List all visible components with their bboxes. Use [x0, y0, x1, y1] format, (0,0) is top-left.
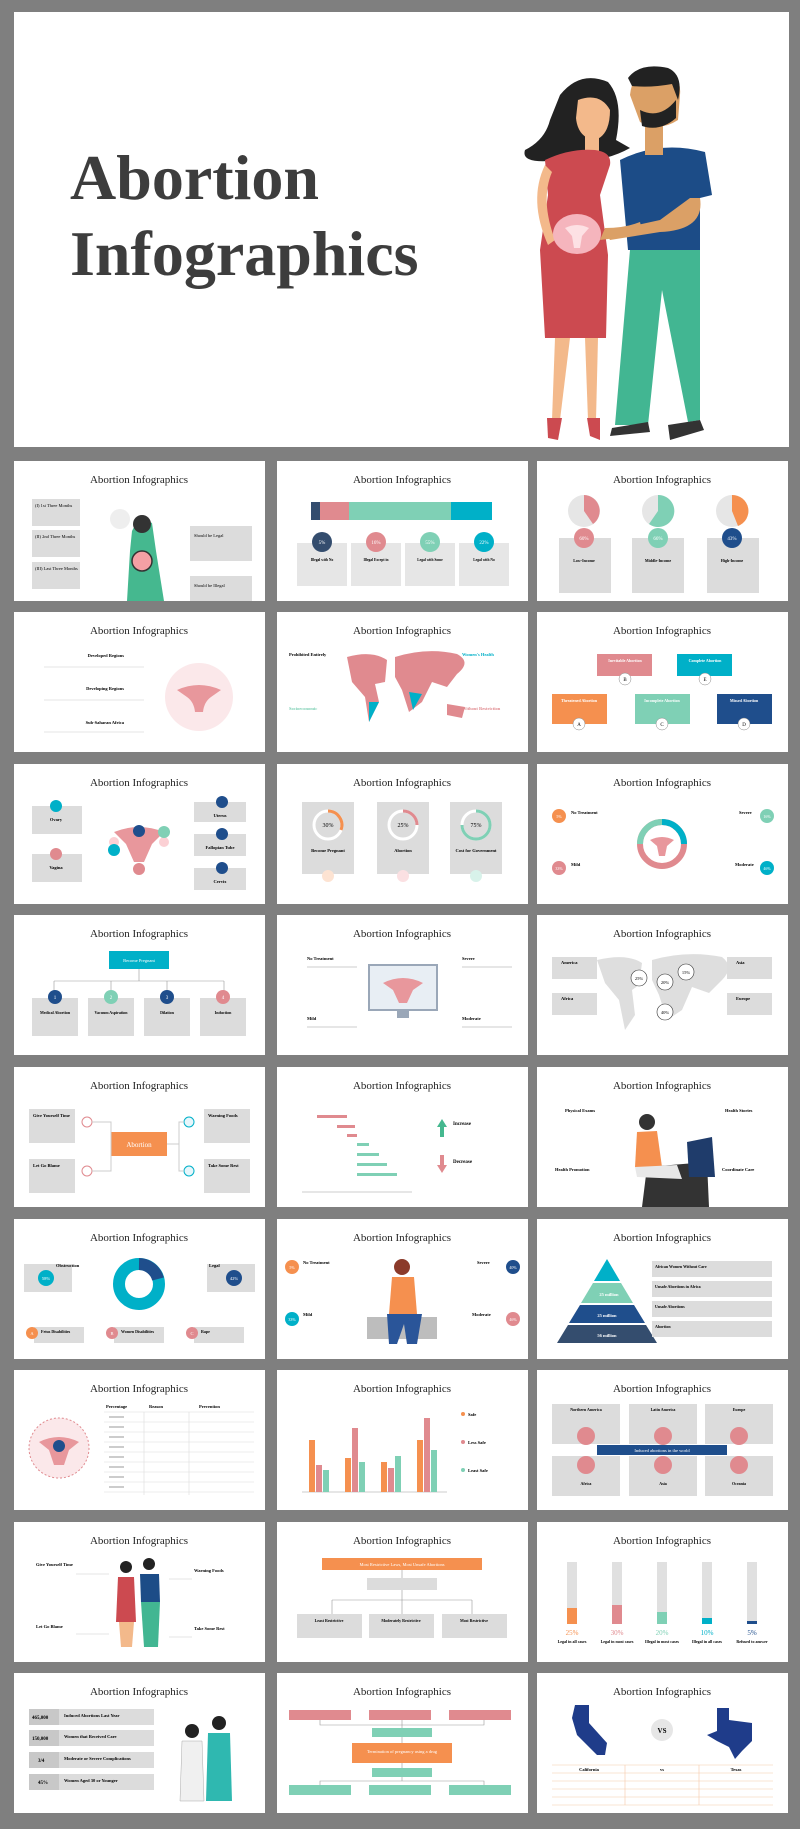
slide r7c3: regions: Abortion Infographics [613, 1383, 711, 1395]
slide r7c3: regions: Europe [733, 1407, 746, 1412]
slide r9c3: California vs Texas: vs [660, 1767, 664, 1772]
slide r4c3: gray world map: Abortion Infographics [613, 928, 711, 940]
slide r5c3: woman on chair: Abortion Infographics [613, 1080, 711, 1092]
slide r6c2: woman head in hands: No Treatment [303, 1260, 330, 1265]
slide r3c3: donut: Mild [571, 862, 581, 867]
slide r1c2: stacked bar [277, 461, 528, 601]
slide r4c2: monitor: Abortion Infographics [353, 928, 451, 940]
slide r4c1: become pregnant tree: Induction [215, 1010, 232, 1015]
slide r6c3: pyramid: 25 million [599, 1292, 619, 1297]
slide r6c1: teal donut: C [190, 1331, 194, 1336]
slide r3c2: progress cards: Cost for Government [456, 848, 497, 853]
slide r6c1: teal donut: Fetus Disabilities [41, 1329, 71, 1334]
slide r6c1: teal donut: Women Disabilities [121, 1329, 154, 1334]
slide r1c3: pies: 60% [579, 537, 589, 542]
slide r4c1: become pregnant tree [14, 915, 265, 1055]
slide r2c1: regions uterus: Abortion Infographics [90, 625, 188, 637]
slide r7c3: regions: Africa [581, 1481, 591, 1486]
slide r1c3: pies [537, 461, 788, 601]
slide r8c3: vertical percent bars: 25% [566, 1629, 579, 1637]
slide r5c1: abortion hub: Abortion [126, 1141, 152, 1149]
slide r8c3: vertical percent bars [537, 1522, 788, 1662]
slide r3c1: anatomy numbered [14, 764, 265, 904]
slide r8c2: restrictive laws tree: Abortion Infographics [353, 1535, 451, 1547]
slide r4c3: gray world map: Asia [736, 960, 745, 965]
slide r8c3: vertical percent bars: 5% [747, 1629, 757, 1637]
slide r9c1: stats list with doctors: Moderate or Severe Complications [64, 1756, 131, 1761]
slide r8c3: vertical percent bars: 20% [656, 1629, 669, 1637]
slide r1c1: months and legality [14, 461, 265, 601]
slide r4c3: gray world map: Africa [561, 996, 574, 1001]
slide r1c1: months and legality: (III) Last Three Months [35, 566, 78, 571]
slide r9c1: stats list with doctors: 465,000 [32, 1716, 49, 1721]
slide r4c3: gray world map: Europe [736, 996, 750, 1001]
slide r3c3: donut: Severe [739, 810, 752, 815]
slide r4c3: gray world map: America [561, 960, 578, 965]
slide r1c2: stacked bar: Abortion Infographics [353, 474, 451, 486]
slide r4c3: gray world map: 25% [635, 976, 643, 981]
slide r4c2: monitor: Mild [307, 1016, 317, 1021]
slide r3c3: donut: 33% [555, 866, 563, 871]
slide r8c2: restrictive laws tree [277, 1522, 528, 1662]
slide r5c2: horizontal bars: Abortion Infographics [353, 1080, 451, 1092]
slide r5c2: horizontal bars: Increase [453, 1122, 472, 1127]
slide r7c2: bar chart [277, 1370, 528, 1510]
slide r1c2: stacked bar: 22% [479, 541, 489, 546]
slide r4c3: gray world map: 20% [661, 980, 669, 985]
slide r3c3: donut: 46% [763, 866, 771, 871]
slide r1c3: pies: 43% [727, 537, 737, 542]
slide r1c3: pies: Low-Income [573, 558, 595, 563]
slide r4c1: become pregnant tree: Vacuum Aspiration [94, 1010, 128, 1015]
slide r4c1: become pregnant tree: Dilation [160, 1010, 175, 1015]
slide r6c1: teal donut: A [30, 1331, 34, 1336]
slide r8c1: couple [14, 1522, 265, 1662]
slide r7c1: table: Reason [149, 1404, 163, 1409]
title [70, 142, 418, 289]
slide r8c1: couple: Let Go Blame [36, 1624, 63, 1629]
slide r5c2: horizontal bars [277, 1067, 528, 1207]
slide r3c1: anatomy numbered: Ovary [50, 817, 63, 822]
slide r2c3: org chart: C [660, 723, 664, 728]
slide r1c2: stacked bar: Legal with No [473, 558, 495, 562]
slide r5c3: woman on chair: Health Stories [725, 1108, 753, 1113]
slide r1c3: pies: Middle-Income [645, 558, 671, 563]
slide r6c2: woman head in hands: 33% [288, 1317, 296, 1322]
slide r1c2: stacked bar: Illegal Except in [364, 558, 388, 562]
slide r8c2: restrictive laws tree: Least Restrictive [315, 1618, 344, 1623]
slide r8c3: vertical percent bars: Refused to answer [736, 1639, 768, 1644]
slide r1c2: stacked bar: 55% [425, 541, 435, 546]
slide r3c1: anatomy numbered: Uterus [214, 813, 227, 818]
slide r4c2: monitor [277, 915, 528, 1055]
slide r4c2: monitor: No Treatment [307, 956, 334, 961]
slide r8c1: couple: Take Some Rest [194, 1626, 225, 1631]
slide r6c2: woman head in hands: 5% [289, 1265, 295, 1270]
slide r2c1: regions uterus: Developed Regions [88, 653, 124, 658]
slide r4c1: become pregnant tree: 2 [110, 996, 113, 1001]
slide r2c3: org chart: E [703, 678, 707, 683]
slide r3c1: anatomy numbered: Cervix [214, 879, 227, 884]
slide r3c3: donut: 5% [556, 814, 562, 819]
slide r9c3: California vs Texas: Abortion Infographics [613, 1686, 711, 1698]
woman [524, 78, 642, 440]
slide r6c3: pyramid: Unsafe Abortions in Africa [655, 1284, 701, 1289]
slide r1c3: pies: 66% [653, 537, 663, 542]
slide r2c3: org chart: Abortion Infographics [613, 625, 711, 637]
slide r9c1: stats list with doctors: 45% [38, 1781, 48, 1786]
slide r6c1: teal donut: B [110, 1331, 114, 1336]
slide r5c1: abortion hub: Abortion Infographics [90, 1080, 188, 1092]
slide r3c1: anatomy numbered: Fallopian Tube [206, 845, 234, 850]
slide r2c3: org chart: A [577, 723, 581, 728]
slide r6c2: woman head in hands: 40% [509, 1265, 517, 1270]
slide r5c3: woman on chair: Coordinate Care [722, 1167, 754, 1172]
slide r2c2: world map: Prohibited Entirely [289, 652, 327, 657]
slide r6c3: pyramid: 56 million [597, 1333, 617, 1338]
title: Abortion [70, 142, 319, 213]
slide r2c3: org chart: B [623, 678, 627, 683]
slide r3c3: donut: Moderate [735, 862, 754, 867]
slide r7c3: regions: Induced abortions in the world [634, 1448, 690, 1453]
slide r1c2: stacked bar: Legal with Some [417, 558, 443, 562]
slide r1c1: months and legality: Should be Legal [194, 533, 224, 538]
slide r7c1: table: Prevention [199, 1404, 220, 1409]
slide r6c1: teal donut: 42% [230, 1276, 238, 1281]
slide r2c2: world map: Abortion Infographics [353, 625, 451, 637]
slide r8c1: couple: Give Yourself Time [36, 1562, 73, 1567]
man [605, 66, 712, 440]
slide r2c2: world map: Socioeconomic [289, 706, 317, 711]
illustration: couple [524, 66, 712, 440]
slide r1c1: months and legality: Should be Illegal [194, 583, 225, 588]
slide r8c3: vertical percent bars: Illegal in most cases [645, 1639, 679, 1644]
slide r8c2: restrictive laws tree: Most Restrictive Laws, Most Unsafe Abortions [360, 1562, 445, 1568]
slide r5c3: woman on chair [537, 1067, 788, 1207]
slide r7c1: table [14, 1370, 265, 1510]
slide r3c1: anatomy numbered: Abortion Infographics [90, 777, 188, 789]
slide r2c3: org chart: D [742, 723, 746, 728]
slide r5c3: woman on chair: Physical Exams [565, 1108, 595, 1113]
slide r8c2: restrictive laws tree: Moderately Restrictive [381, 1618, 421, 1623]
slide r8c3: vertical percent bars: 30% [611, 1629, 624, 1637]
slide r3c2: progress cards [277, 764, 528, 904]
slide r7c3: regions: Latin America [651, 1407, 675, 1412]
slide r3c3: donut [537, 764, 788, 904]
slide r9c3: California vs Texas: Texas [731, 1767, 742, 1772]
slide r5c2: horizontal bars: Decrease [453, 1160, 473, 1165]
slide r5c3: woman on chair: Health Promotion [555, 1167, 590, 1172]
slide r2c2: world map: Women's Health [462, 652, 494, 657]
slide r5c1: abortion hub: Warning Foods [208, 1113, 238, 1118]
slide r4c2: monitor: Moderate [462, 1016, 481, 1021]
slide r4c1: become pregnant tree: 4 [222, 996, 225, 1001]
slide r1c1: months and legality: (II) 2nd Three Months [35, 534, 76, 539]
slide r9c3: California vs Texas: VS [658, 1727, 667, 1735]
slide r9c2: flow boxes [277, 1673, 528, 1813]
slide r6c1: teal donut: Abortion Infographics [90, 1232, 188, 1244]
slide r2c2: world map: Without Restriction [462, 706, 501, 711]
slide r9c1: stats list with doctors: Induced Abortions Last Year [64, 1713, 119, 1718]
slide r5c1: abortion hub: Take Some Rest [208, 1163, 239, 1168]
slide r6c1: teal donut: Legal [209, 1263, 220, 1268]
slide r6c3: pyramid: Abortion Infographics [613, 1232, 711, 1244]
slide r3c2: progress cards: 25% [398, 823, 408, 829]
slide r1c2: stacked bar: Illegal with No [311, 558, 333, 562]
slide r8c1: couple: Abortion Infographics [90, 1535, 188, 1547]
slide r3c3: donut: Abortion Infographics [613, 777, 711, 789]
slide r9c1: stats list with doctors: 3/4 [38, 1759, 45, 1764]
slide r3c2: progress cards: Become Pregnant [311, 848, 345, 853]
slide r8c3: vertical percent bars: Abortion Infographics [613, 1535, 711, 1547]
slide r6c3: pyramid: Abortion [655, 1324, 671, 1329]
slide r9c1: stats list with doctors [14, 1673, 265, 1813]
slide r4c3: gray world map: 15% [682, 970, 690, 975]
slide r3c2: progress cards: Abortion [394, 848, 412, 853]
slide r2c3: org chart: Threatened Abortion [561, 698, 598, 703]
slide r2c3: org chart: Incomplete Abortion [644, 698, 680, 703]
slide r6c2: woman head in hands [277, 1219, 528, 1359]
slide r8c3: vertical percent bars: Legal in most cases [601, 1639, 634, 1644]
slide r7c3: regions: Asia [659, 1481, 667, 1486]
slide r6c2: woman head in hands: Moderate [472, 1312, 491, 1317]
slide r7c3: regions: Northern America [570, 1407, 602, 1412]
slide r7c1: table: Percentage [106, 1404, 127, 1409]
slide r4c1: become pregnant tree: Become Pregnant [123, 958, 156, 963]
slide r6c1: teal donut [14, 1219, 265, 1359]
slide r9c1: stats list with doctors: Women Aged 30 or Younger [64, 1778, 118, 1783]
slide r8c2: restrictive laws tree: Most Restrictive [460, 1618, 488, 1623]
slide r5c1: abortion hub [14, 1067, 265, 1207]
slide r2c3: org chart: Complete Abortion [689, 658, 722, 663]
slide r4c3: gray world map [537, 915, 788, 1055]
slide r7c2: bar chart: Abortion Infographics [353, 1383, 451, 1395]
slide r7c3: regions: Oceania [732, 1481, 746, 1486]
slide r4c2: monitor: Severe [462, 956, 475, 961]
slide r6c2: woman head in hands: 46% [509, 1317, 517, 1322]
slide r1c1: months and legality: Abortion Infographics [90, 474, 188, 486]
slide r5c1: abortion hub: Let Go Blame [33, 1163, 60, 1168]
slide r6c3: pyramid: Unsafe Abortions [655, 1304, 685, 1309]
hero panel [14, 12, 789, 447]
slide r8c1: couple: Warning Foods [194, 1568, 224, 1573]
slide r2c3: org chart: Inevitable Abortion [608, 658, 642, 663]
slide r8c3: vertical percent bars: Illegal in all cases [692, 1639, 722, 1644]
slide r9c1: stats list with doctors: Women that Received Care [64, 1734, 117, 1739]
slide r4c3: gray world map: 40% [661, 1010, 669, 1015]
slide r4c1: become pregnant tree: Abortion Infographics [90, 928, 188, 940]
slide r3c1: anatomy numbered: Vagina [49, 865, 63, 870]
slide r6c2: woman head in hands: Severe [477, 1260, 490, 1265]
slide r7c2: bar chart: Safe [468, 1412, 476, 1417]
slide r2c3: org chart [537, 612, 788, 752]
slide r2c1: regions uterus [14, 612, 265, 752]
slide r3c2: progress cards: 75% [470, 823, 482, 829]
slide r7c2: bar chart: Less Safe [468, 1440, 486, 1445]
slide r9c1: stats list with doctors: Abortion Infographics [90, 1686, 188, 1698]
title: Infographics [70, 218, 418, 289]
slide r6c2: woman head in hands: Abortion Infographics [353, 1232, 451, 1244]
slide r9c3: California vs Texas: California [579, 1767, 600, 1772]
slide r3c2: progress cards: Abortion Infographics [353, 777, 451, 789]
slide r9c1: stats list with doctors: 150,000 [32, 1737, 49, 1742]
slide r3c2: progress cards: 30% [322, 823, 334, 829]
slide r7c3: regions [537, 1370, 788, 1510]
slide r6c1: teal donut: 58% [42, 1276, 50, 1281]
slide r6c1: teal donut: Rape [201, 1329, 210, 1334]
slide r1c1: months and legality: (I) 1st Three Months [35, 503, 73, 508]
slide r3c3: donut: No Treatment [571, 810, 598, 815]
slide r1c3: pies: High-Income [721, 558, 743, 563]
slide r8c3: vertical percent bars: 10% [701, 1629, 714, 1637]
slide r6c1: teal donut: Obstruction [56, 1263, 80, 1268]
slide r1c3: pies: Abortion Infographics [613, 474, 711, 486]
slide r6c3: pyramid [537, 1219, 788, 1359]
slide r4c1: become pregnant tree: 3 [166, 996, 169, 1001]
slide r9c2: flow boxes: Abortion Infographics [353, 1686, 451, 1698]
slide r2c1: regions uterus: Developing Regions [86, 686, 124, 691]
slide r1c2: stacked bar: 5% [319, 541, 325, 546]
slide r6c2: woman head in hands: Mild [303, 1312, 313, 1317]
slide r9c3: California vs Texas [537, 1673, 788, 1813]
slide r2c1: regions uterus: Sub-Saharan Africa [86, 720, 125, 725]
slide r7c2: bar chart: Least Safe [468, 1468, 488, 1473]
slide r2c2: world map [277, 612, 528, 752]
slide r5c1: abortion hub: Give Yourself Time [33, 1113, 70, 1118]
slide r9c2: flow boxes: Termination of pregnancy using a drug [367, 1749, 438, 1754]
slide r1c2: stacked bar: 16% [371, 541, 381, 546]
slide r6c3: pyramid: African Women Without Care [655, 1264, 707, 1269]
slide r3c3: donut: 16% [763, 814, 771, 819]
slide r7c1: table: Abortion Infographics [90, 1383, 188, 1395]
slide r4c1: become pregnant tree: 1 [54, 996, 57, 1001]
slide r4c1: become pregnant tree: Medical Abortion [40, 1010, 71, 1015]
slide r8c3: vertical percent bars: Legal in all cases [558, 1639, 587, 1644]
slide r6c3: pyramid: 25 million [597, 1313, 617, 1318]
slide r2c3: org chart: Missed Abortion [730, 698, 759, 703]
